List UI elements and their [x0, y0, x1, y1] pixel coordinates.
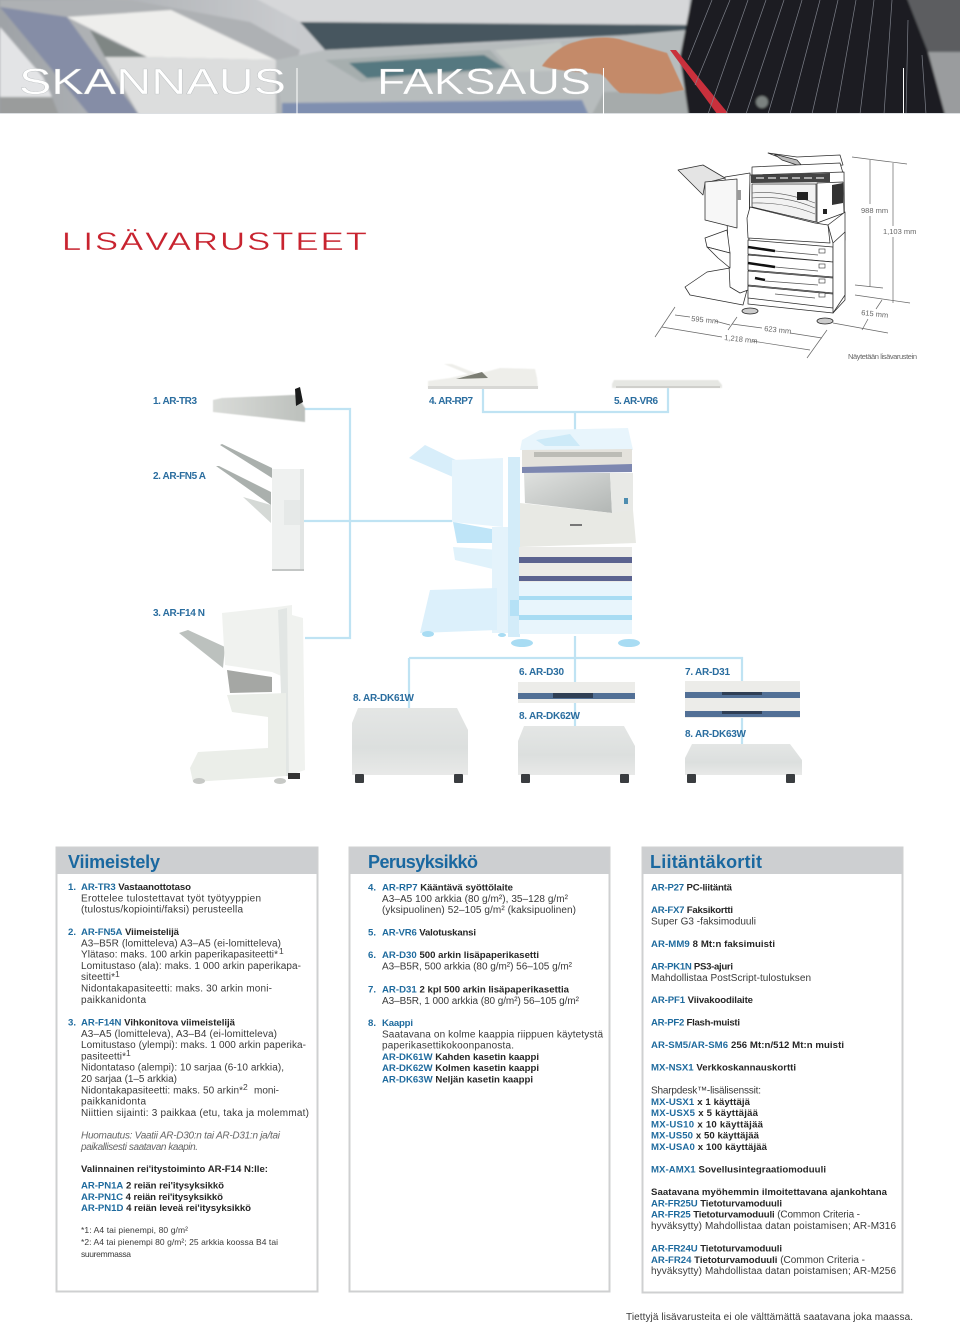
- text: panel 1 items: siteetti*: [81, 972, 115, 983]
- text: panel 1 items: AR-PN1A 2 reiän rei'itysyksikkö: [81, 1180, 224, 1192]
- text: panel 3 items: Saatavana myöhemmin ilmoitettavana ajankohtana: [651, 1187, 888, 1198]
- text: panel 2 items: 4.: [368, 882, 376, 894]
- text: panel 2 items: AR-DK61W Kahden kasetin kaappi: [382, 1052, 539, 1063]
- text: panel 2 items: 6.: [368, 950, 376, 961]
- text: panel 2 items: 8.: [368, 1018, 376, 1029]
- text: panel 2 items: AR-D30 500 arkin lisäpaperikasetti: [382, 950, 539, 961]
- text: panel 2 items: AR-DK63W Neljän kasetin kaappi: [382, 1074, 533, 1086]
- dimension labels: 623 mm: [764, 324, 792, 336]
- main unit photo: [409, 428, 640, 647]
- heading: SKANNAUS: SKANNAUS: [19, 61, 286, 102]
- icon: hand on control panel: [542, 38, 684, 94]
- text: panel 3 items: AR-FR25U Tietoturvamoduuli: [651, 1198, 782, 1209]
- label: 1. AR-TR3: 1. AR-TR3: [153, 396, 197, 407]
- heading: Viimeistely: Viimeistely: [68, 852, 160, 872]
- text: panel 1 items: 1: [115, 969, 120, 979]
- text: panel 1 items: Nidontataso (alempi): 10 sarjaa (6-10 arkkia),: [81, 1063, 284, 1074]
- text: panel 1 items: moni-: [254, 1085, 279, 1096]
- accessory: 2. AR-FN5A: [153, 444, 304, 571]
- text: panel 1 items: Lomitustaso (ylempi): maks. 1 000 arkin paperika-: [81, 1040, 306, 1051]
- text: panel 2 items: (yksipuolinen) 52–105 g/m² (kaksipuolinen): [382, 905, 576, 916]
- text: panel 1 items: Huomautus: Vaatii AR-D30:n tai AR-D31:n ja/tai: [81, 1130, 281, 1142]
- accessory: 3. AR-F14N: [153, 605, 305, 784]
- hero photo banner: [0, 0, 960, 118]
- label: 5. AR-VR6: 5. AR-VR6: [614, 396, 658, 407]
- dimension labels: 1,218 mm: [724, 333, 758, 345]
- dimension labels: 988 mm: [861, 206, 888, 215]
- text: panel 1 items: AR-TR3 Vastaanottotaso: [81, 882, 191, 893]
- text: panel 3 items: AR-PF2 Flash-muisti: [651, 1018, 740, 1028]
- dimension labels: 595 mm: [691, 314, 719, 326]
- text: panel 1 items: Lomitustaso (ala): maks. 1 000 arkin paperikapa-: [81, 961, 301, 972]
- text: panel 1 items: 2: [243, 1082, 248, 1092]
- text: panel 1 items: Ylätaso: maks. 100 arkin paperikapasiteetti*: [81, 950, 278, 961]
- text: panel 1 items: paikkanidonta: [81, 1097, 146, 1108]
- text: panel 3 items: AR-PF1 Viivakoodilaite: [651, 995, 753, 1006]
- text: panel 3 items: MX-AMX1 Sovellusintegraatiomoduuli: [651, 1164, 826, 1176]
- connector lines: [303, 388, 742, 745]
- text: panel 1 items: Erottelee tulostettavat työt työtyyppien: [81, 893, 261, 904]
- heading: Perusyksikkö: Perusyksikkö: [368, 852, 478, 872]
- text: panel 3 items: MX-NSX1 Verkkoskannauskortti: [651, 1062, 796, 1074]
- text: panel 1 items: paikallisesti saatavan kaapin.: [80, 1142, 198, 1153]
- text: panel 1 items: 3.: [68, 1018, 76, 1028]
- text: panel 2 items: [368, 882, 603, 1086]
- text: panel 3 items: AR-SM5/AR-SM6 256 Mt:n/512 Mt:n muisti: [651, 1040, 844, 1051]
- text: panel 1 items: Nidontakapasiteetti: maks. 30 arkin moni-: [81, 984, 272, 994]
- text: panel 3 items: MX-USX5 x 5 käyttäjää: [651, 1108, 759, 1119]
- text: panel 3 items: MX-US50 x 50 käyttäjää: [651, 1131, 760, 1142]
- text: panel 3 items: Sharpdesk™-lisälisenssit:: [651, 1086, 761, 1096]
- text: panel 3 items: AR-FR24 Tietoturvamoduuli (Common Criteria -: [651, 1255, 865, 1266]
- dimension labels: [691, 206, 917, 361]
- text: panel 1 items: *1: A4 tai pienempi, 80 g/m²: [81, 1225, 188, 1235]
- panel: Viimeistely: [56, 848, 318, 1292]
- text: panel 3 items: hyväksytty) Mahdollistaa datan poistamisen; AR-M316: [651, 1221, 896, 1232]
- dimension labels: 1,103 mm: [883, 227, 916, 236]
- label: 8. AR-DK62W: 8. AR-DK62W: [519, 711, 581, 722]
- text: panel 3 items: AR-P27 PC-liitäntä: [651, 882, 733, 894]
- text: panel 3 items: AR-FR24U Tietoturvamoduuli: [651, 1244, 782, 1254]
- text: panel 3 items: MX-US10 x 10 käyttäjää: [651, 1119, 764, 1130]
- text: panel 2 items: Kaappi: [382, 1018, 413, 1029]
- machine line drawing with dimensions: [655, 153, 917, 361]
- text: panel 1 items: [68, 882, 309, 1259]
- text: panel 1 items: suuremmassa: [81, 1249, 131, 1259]
- dimension labels: 615 mm: [861, 308, 889, 320]
- text: panel 2 items: A3–A5 100 arkkia (80 g/m²), 35–128 g/m²: [382, 894, 569, 905]
- text: panel 1 items: 2.: [68, 927, 76, 938]
- text: panel 3 items: Super G3 -faksimoduuli: [651, 916, 756, 927]
- label: 7. AR-D31: 7. AR-D31: [685, 667, 730, 678]
- text: panel 1 items: Valinnainen rei'itystoiminto AR-F14 N:lle:: [81, 1164, 268, 1175]
- text: panel 3 items: AR-FR25 Tietoturvamoduuli (Common Criteria -: [651, 1210, 860, 1221]
- label: 6. AR-D30: 6. AR-D30: [519, 667, 564, 678]
- text: panel 3 items: hyväksytty) Mahdollistaa datan poistamisen; AR-M256: [651, 1266, 896, 1277]
- text: panel 2 items: AR-DK62W Kolmen kasetin kaappi: [382, 1063, 539, 1074]
- text: panel 3 items: AR-PK1N PS3-ajuri: [651, 962, 733, 972]
- label: 4. AR-RP7: 4. AR-RP7: [429, 396, 473, 407]
- accessory: 4. AR-RP7: [428, 364, 538, 407]
- heading: FAKSAUS: FAKSAUS: [377, 61, 591, 102]
- panel: Liitäntäkortit: [642, 848, 902, 1292]
- text: panel 1 items: Niittien sijainti: 3 paikkaa (etu, taka ja molemmat): [81, 1108, 309, 1119]
- accessory: 5. AR-VR6: [612, 380, 722, 407]
- text: panel 3 items: MX-USA0 x 100 käyttäjää: [651, 1142, 768, 1153]
- dimension labels: Näytetään lisävarustein: [848, 352, 917, 361]
- text: panel 1 items: AR-PN1C 4 reiän rei'itysyksikkö: [81, 1192, 223, 1203]
- label: 8. AR-DK61W: 8. AR-DK61W: [353, 693, 415, 704]
- label: 8. AR-DK63W: 8. AR-DK63W: [685, 729, 747, 740]
- text: panel 2 items: AR-VR6 Valotuskansi: [382, 928, 476, 938]
- panel: Perusyksikkö: [350, 848, 610, 1292]
- text: panel 1 items: AR-PN1D 4 reiän leveä rei'itysyksikkö: [81, 1203, 251, 1214]
- text: panel 3 items: [651, 882, 896, 1277]
- text: panel 2 items: AR-D31 2 kpl 500 arkin lisäpaperikasettia: [382, 984, 570, 996]
- text: panel 3 items: AR-FX7 Faksikortti: [651, 905, 733, 916]
- text: panel 1 items: Nidontakapasiteetti: maks. 50 arkin*: [81, 1085, 243, 1096]
- accessory: 1. AR-TR3: [153, 387, 305, 422]
- text: panel 1 items: A3–A5 (lomitteleva), A3–B4 (ei-lomitteleva): [81, 1029, 277, 1040]
- accessory: 7. AR-D31: [685, 667, 800, 718]
- text: panel 3 items: AR-MM9 8 Mt:n faksimuisti: [651, 939, 775, 950]
- text: panel 1 items: (tulostus/kopiointi/faksi) perusteella: [81, 905, 243, 916]
- heading: Liitäntäkortit: Liitäntäkortit: [650, 852, 762, 872]
- label: 3. AR-F14N: 3. AR-F14 N: [153, 608, 205, 619]
- title: Lisävarusteet: LISÄVARUSTEET: [62, 228, 369, 256]
- text: panel 1 items: 1.: [68, 882, 76, 893]
- text: panel 1 items: 1: [279, 946, 284, 956]
- accessory: 8. AR-DK63W: [685, 729, 802, 783]
- text: panel 1 items: *2: A4 tai pienempi 80 g/m²; 25 arkkia koossa B4 tai: [81, 1237, 278, 1247]
- text: panel 2 items: A3–B5R, 1 000 arkkia (80 g/m²) 56–105 g/m²: [382, 996, 580, 1007]
- accessory: 6. AR-D30: [518, 667, 635, 703]
- text: panel 1 items: pasiteetti*: [81, 1051, 126, 1062]
- text: panel 2 items: 5.: [368, 928, 376, 938]
- text: panel 1 items: AR-F14N Vihkonitova viimeistelijä: [81, 1018, 236, 1028]
- text: panel 2 items: 7.: [368, 984, 376, 996]
- accessory: 8. AR-DK61W: [352, 693, 468, 783]
- text: panel 2 items: AR-RP7 Kääntävä syöttölaite: [382, 882, 513, 894]
- text: panel 1 items: AR-FN5A Viimeistelijä: [81, 927, 180, 938]
- text: panel 1 items: paikkanidonta: [81, 995, 146, 1006]
- text: panel 2 items: paperikasettikokoonpanosta.: [382, 1041, 514, 1052]
- label: 2. AR-FN5A: 2. AR-FN5 A: [153, 471, 206, 482]
- text: panel 1 items: A3–B5R (lomitteleva) A3–A5 (ei-lomitteleva): [81, 938, 281, 949]
- accessory: 8. AR-DK62W: [518, 711, 635, 783]
- text: panel 3 items: MX-USX1 x 1 käyttäjä: [651, 1097, 751, 1108]
- text: panel 1 items: 1: [126, 1048, 131, 1058]
- text: panel 2 items: Saatavana on kolme kaappia riippuen käytetystä: [382, 1029, 603, 1040]
- text: panel 3 items: Mahdollistaa PostScript-tulostuksen: [651, 973, 811, 984]
- text: panel 2 items: A3–B5R, 500 arkkia (80 g/m²) 56–105 g/m²: [382, 961, 573, 972]
- text: panel 1 items: 20 sarjaa (1–5 arkkia): [81, 1074, 177, 1085]
